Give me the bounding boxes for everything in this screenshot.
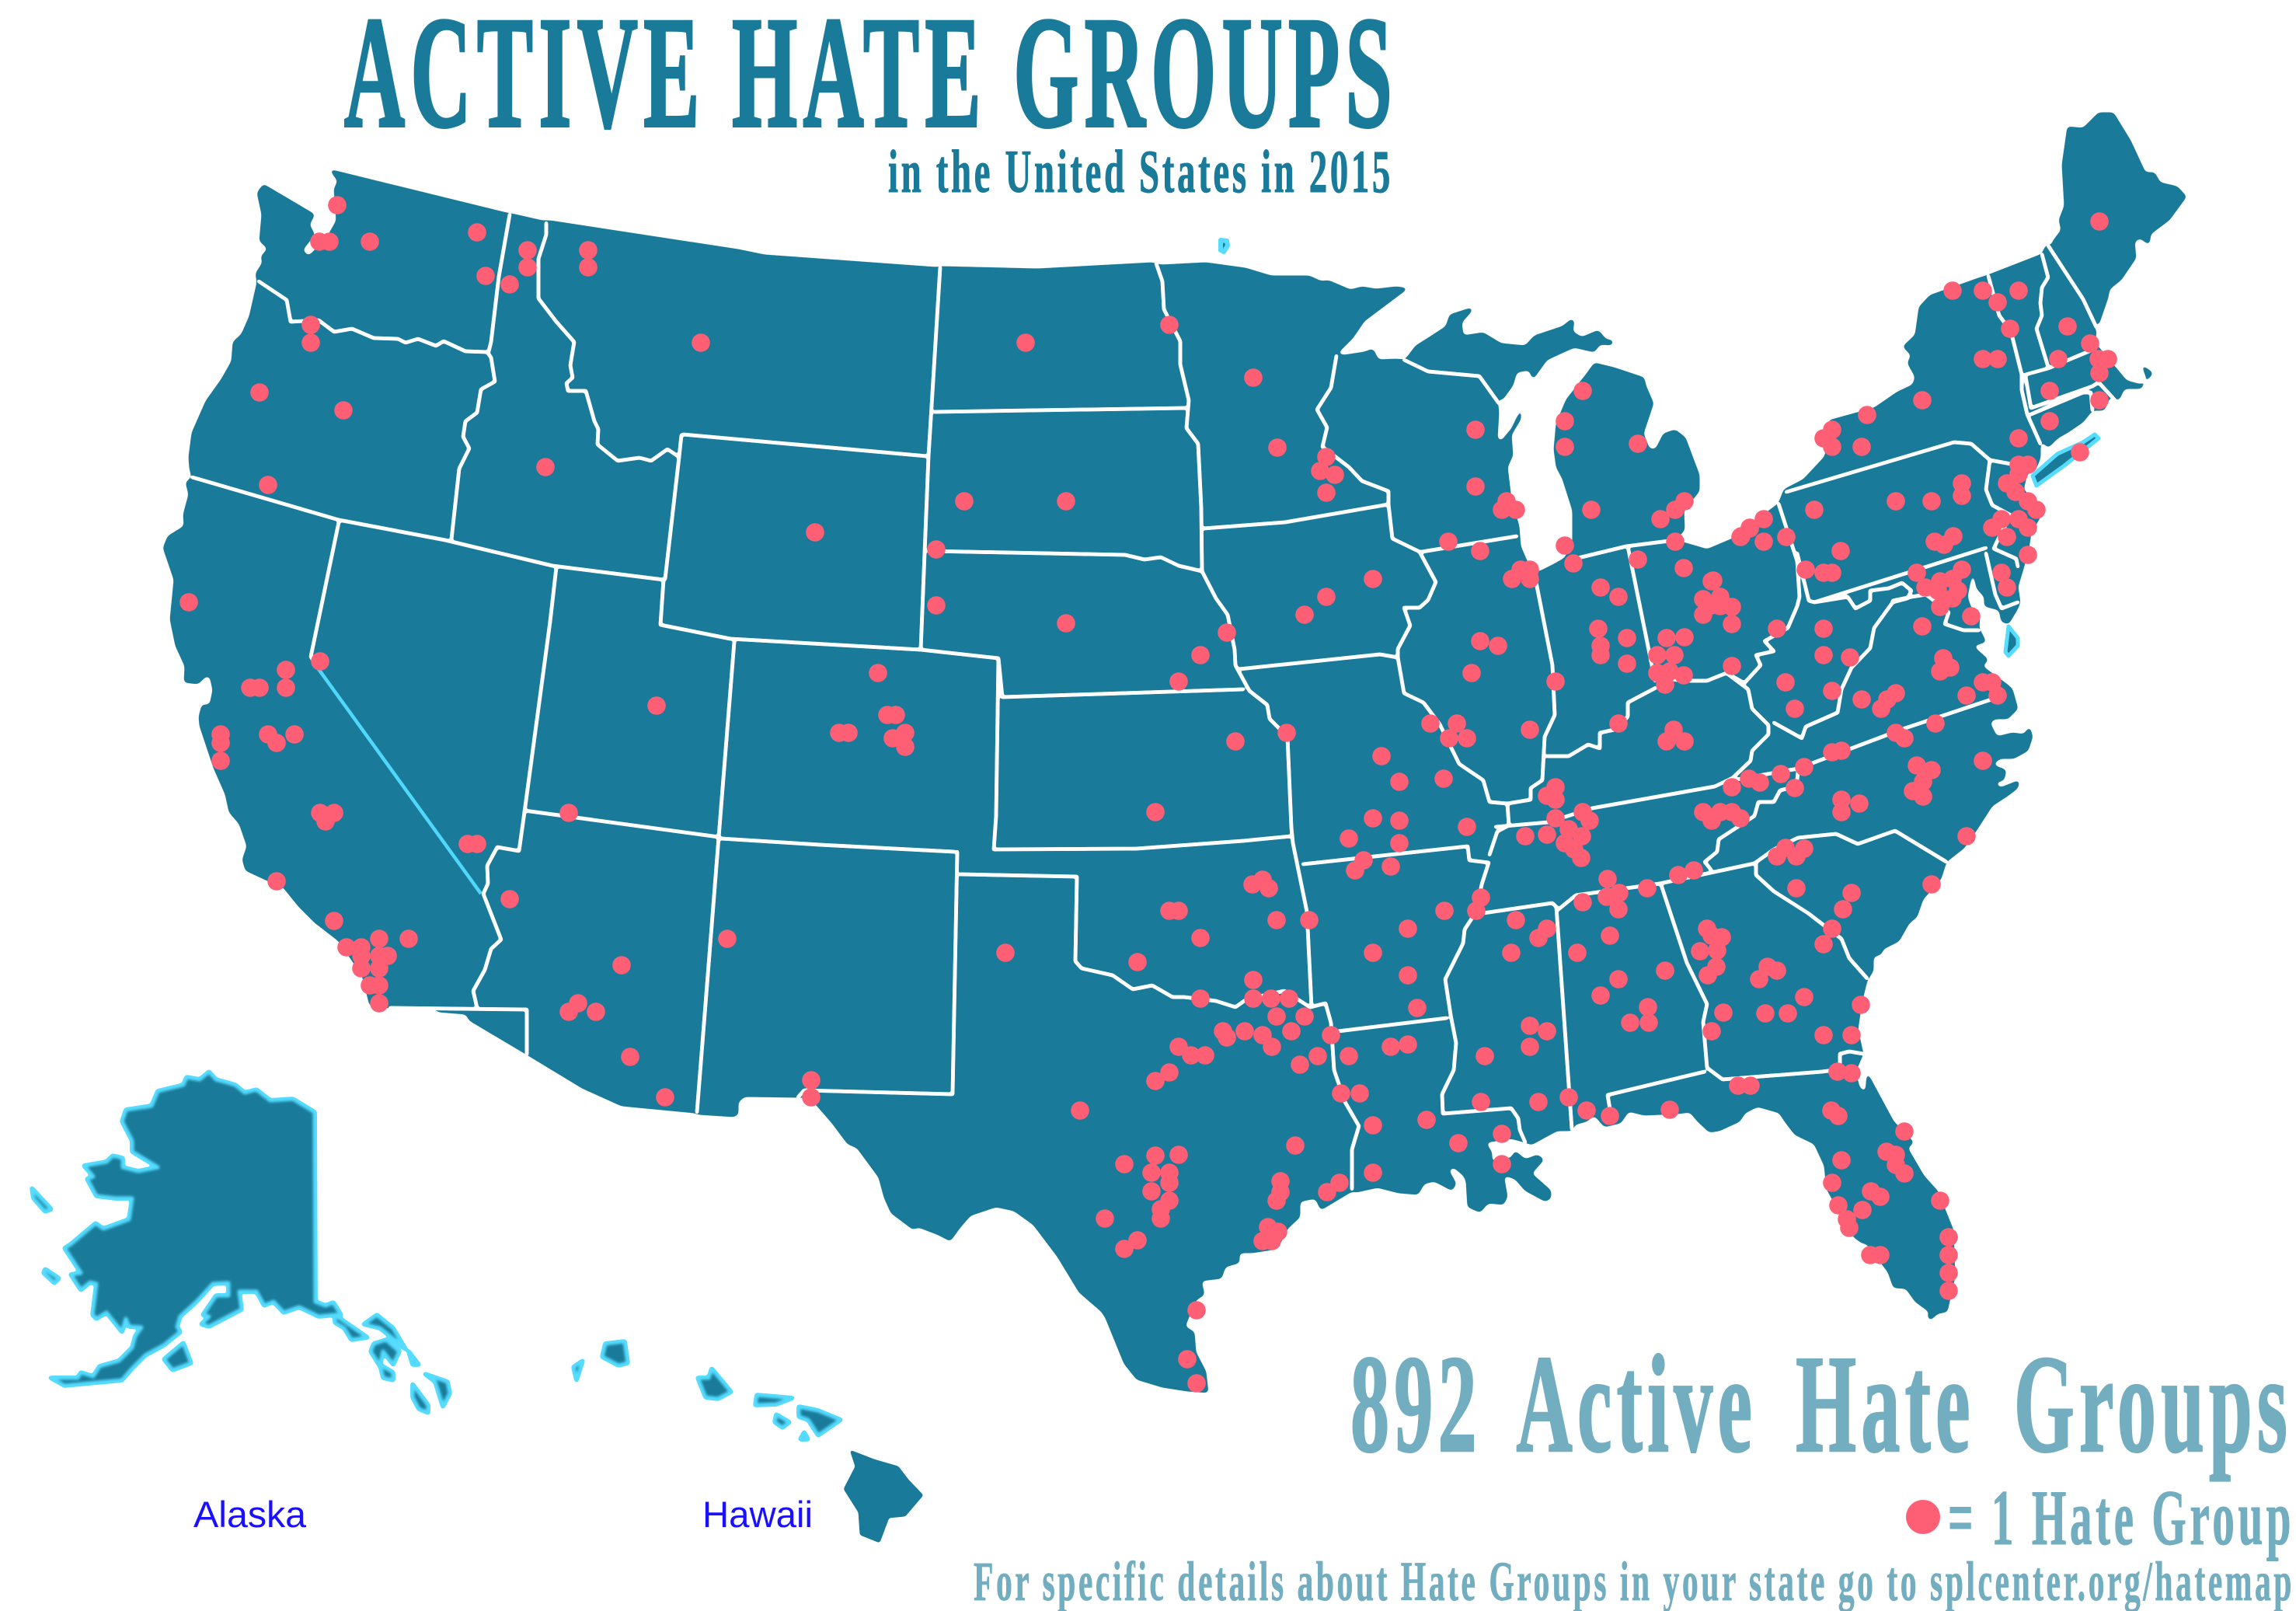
map: contiguous United States [163, 113, 2186, 1393]
legend dot [1906, 1500, 1940, 1534]
dots: one per hate group [179, 196, 2117, 1393]
legend [1906, 1474, 2294, 1562]
Big Island [844, 1450, 923, 1543]
map: Hawaii [573, 1341, 923, 1543]
island: Lake of the Woods [1221, 240, 1228, 252]
label: Hawaii: Hawaii [702, 1494, 813, 1535]
state borders [192, 214, 2115, 1189]
map: Alaska [32, 1072, 450, 1413]
landmass outline [163, 113, 2186, 1393]
Alaska islands and panhandle [32, 1188, 450, 1413]
cyan California–Nevada border [319, 669, 481, 894]
island: Long Island [2033, 434, 2099, 486]
subtitle: in the United States in 2015 [888, 138, 1393, 205]
label: Alaska: Alaska [193, 1494, 307, 1535]
Alaska mainland [51, 1072, 341, 1386]
Hawaii outlined islands [573, 1341, 841, 1439]
island: Delmarva barrier [2005, 626, 2018, 656]
